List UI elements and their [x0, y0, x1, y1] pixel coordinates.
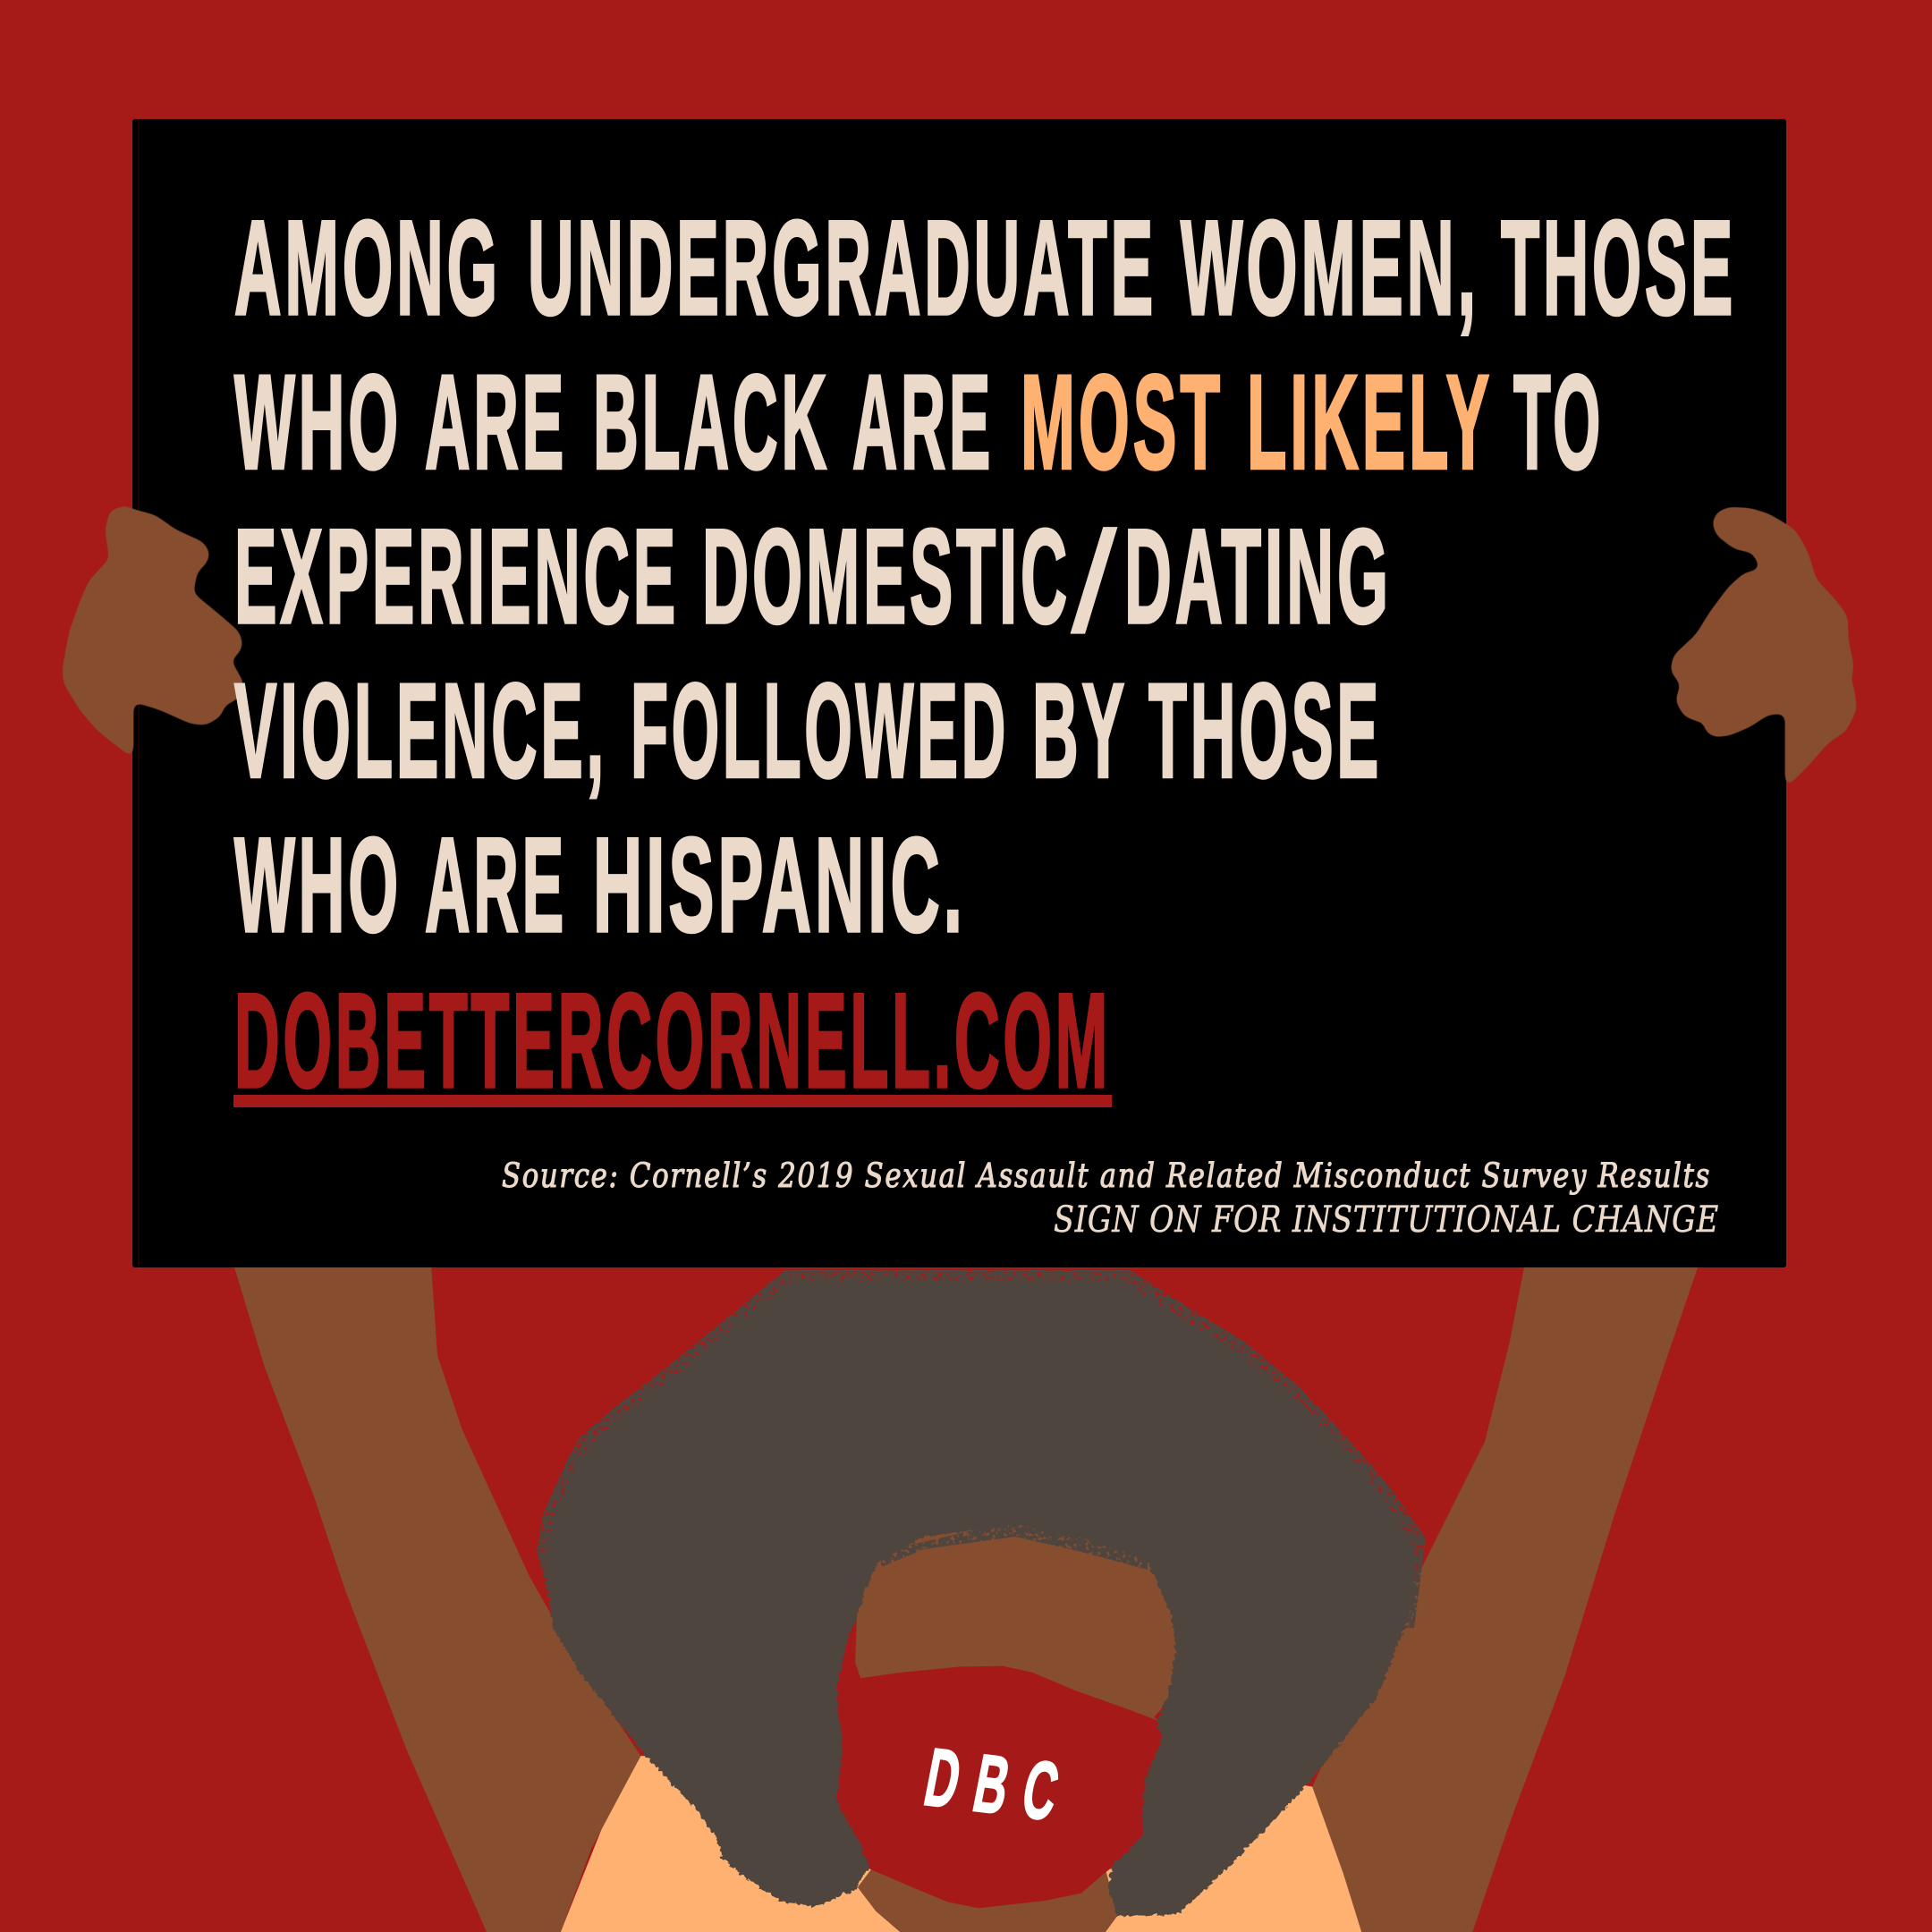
headline statement: ARE: [852, 347, 994, 497]
left arm: [234, 1267, 640, 1932]
headline statement: ARE: [425, 809, 567, 960]
headline statement: THOSE: [1148, 655, 1382, 805]
hair: curly hairline: [881, 1521, 1148, 1570]
mask strap right: [1154, 1693, 1178, 1724]
panel: black sign: [132, 119, 1786, 1267]
headline statement: HISPANIC.: [593, 809, 966, 960]
source note: Source: Cornell’s 2019 Sexual Assault and Related Misconduct Survey Results: [502, 1157, 1711, 1195]
icon: left hand: [64, 506, 243, 758]
headline statement: LIKELY: [1247, 347, 1493, 497]
right arm: [1312, 1267, 1698, 1932]
headline statement: ARE: [425, 347, 567, 497]
hair: solid mass: [546, 1281, 1415, 1916]
headline statement: AMONG: [234, 192, 501, 343]
mask label: DBC: DBC: [918, 1731, 1065, 1837]
mask strap left: [827, 1621, 860, 1688]
headline statement: WHO: [234, 809, 402, 960]
headline statement: EXPERIENCE: [234, 501, 679, 651]
headline statement: WOMEN,: [1181, 192, 1479, 343]
headline statement: VIOLENCE,: [234, 655, 607, 805]
face: [854, 1509, 1181, 1722]
headline statement: DOMESTIC: [702, 501, 1071, 651]
headline statement: MOST: [1021, 347, 1224, 497]
headline statement: /: [1072, 502, 1117, 662]
neck and chin: [858, 1863, 1118, 1932]
headline statement: WHO: [234, 347, 402, 497]
shirt: [561, 1756, 1361, 1932]
headline statement: BY: [1032, 655, 1128, 805]
headline statement: FOLLOWED: [631, 655, 1009, 805]
headline statement: [234, 192, 1736, 960]
face mask: [821, 1666, 1175, 1908]
headline statement: BLACK: [593, 347, 830, 497]
headline statement: DATING: [1124, 501, 1392, 651]
hair: frizzy crown edge: [537, 1270, 1426, 1628]
headline statement: TO: [1513, 347, 1604, 497]
call to action: SIGN ON FOR INSTITUTIONAL CHANGE: [1054, 1199, 1719, 1241]
headline statement: UNDERGRADUATE: [528, 192, 1157, 343]
icon: right hand: [1671, 508, 1856, 787]
figure: person holding sign: [234, 1267, 1698, 1932]
website link: [233, 965, 1112, 1115]
